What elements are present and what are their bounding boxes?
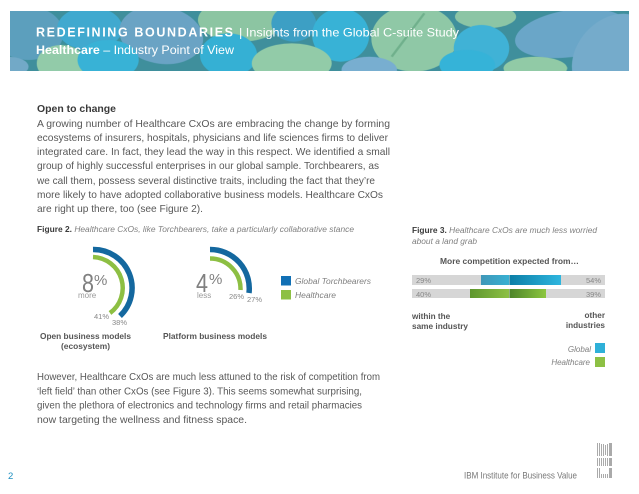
legend: figure 3: Healthcare [551,358,591,367]
stat: 8% more: more [78,291,97,300]
legend: figure 3 [551,343,605,367]
bar chart: competition: 54% [586,276,601,285]
bar chart: competition: 29% [416,276,431,285]
value 27%: 27% [247,295,262,304]
label: other industries [566,311,606,330]
text block: however [37,371,380,426]
value 41%: 41% [94,312,109,321]
stat: 4% less [196,268,222,300]
label: other industries: industries [566,321,605,330]
stat: 8% more: 8 [82,268,94,298]
value 26%: 26% [229,292,244,301]
text block: however: ‘left field’ than other CxOs (see Figure 3). This seems somewhat surprising, [37,386,362,398]
label: open business models: Open business models [40,332,131,341]
arc: global torchbearers 27% [210,249,249,293]
arc: healthcare 41% [93,257,123,313]
text block: open to change: Open to change [37,103,116,115]
value 38%: 38% [112,318,127,327]
footer: ibm institute for business value: IBM Institute for Business Value [464,470,577,482]
legend: figure 2: Global Torchbearers [295,277,371,286]
label: other industries: other [585,311,606,320]
text block: open to change: integrated care. In fact, they lead the way in this respect. We identified a small [37,146,390,158]
text block: however: now targeting the wellness and fitness space. [37,414,247,426]
label: open business models: (ecosystem) [61,342,110,351]
figure 3 caption [412,226,598,246]
legend: figure 3: Global [568,345,591,354]
banner [0,0,639,107]
banner title: REDEFINING BOUNDARIES [36,26,233,40]
text block: open to change: group of highly successful enterprises in our global sample. Torchbearers, as [37,160,379,172]
legend: figure 2 [281,276,371,300]
chart: open business models [40,249,132,351]
banner second line: Healthcare – Industry Point of View [36,45,235,57]
arc: healthcare 26% [210,258,241,290]
label: platform business models: Platform business models [163,332,267,341]
figure 3 caption: Figure 3. Healthcare CxOs are much less worried [412,226,598,235]
label: within the same industry: within the [411,312,451,321]
figure 2 caption: Figure 2. Healthcare CxOs, like Torchbearers, take a particularly collaborative stance [37,225,355,234]
figure 3 caption: about a land grab [412,237,478,246]
arc: global torchbearers 38% [93,249,132,316]
icon: ibm logo [597,443,612,478]
stat: 8% more [78,268,107,300]
stat: 4% less: less [197,291,211,300]
bar chart: competition: 39% [586,290,601,299]
text block: however: given the plethora of electronics and technology firms and retail pharmacies [37,400,362,412]
label: within the same industry [411,312,468,331]
chart: platform business models [163,249,267,341]
stat: 8% more: % [94,272,107,289]
page number: 2 [8,471,13,482]
bar chart: competition [412,275,605,299]
text block: open to change: we call them, possess several distinctive traits, including the fact that they’re [36,175,375,187]
text block: open to change: ecosystems of insurers, hospitals, physicians and life sciences firms to deliver [37,132,388,144]
stat: 4% less: 4 [196,268,208,298]
banner subtitle: | Insights from the Global C-suite Study [239,26,459,40]
text block: however: However, Healthcare CxOs are much less attuned to the risk of competition from [37,371,380,383]
text block: open to change: A growing number of Healthcare CxOs are embracing the change by forming [37,118,390,130]
text block: open to change: are right up there, too (see Figure 2). [37,203,203,215]
legend: figure 2: Healthcare [295,291,337,300]
chart heading: More competition expected from… [440,256,579,266]
bar chart: competition: 40% [416,290,431,299]
label: open business models [40,332,131,351]
text block: open to change: more likely to have adopted collaborative business models. Healthcare CxOs [37,189,383,201]
label: within the same industry: same industry [412,322,468,331]
stat: 4% less: % [209,271,222,288]
text block: open to change [36,103,390,215]
